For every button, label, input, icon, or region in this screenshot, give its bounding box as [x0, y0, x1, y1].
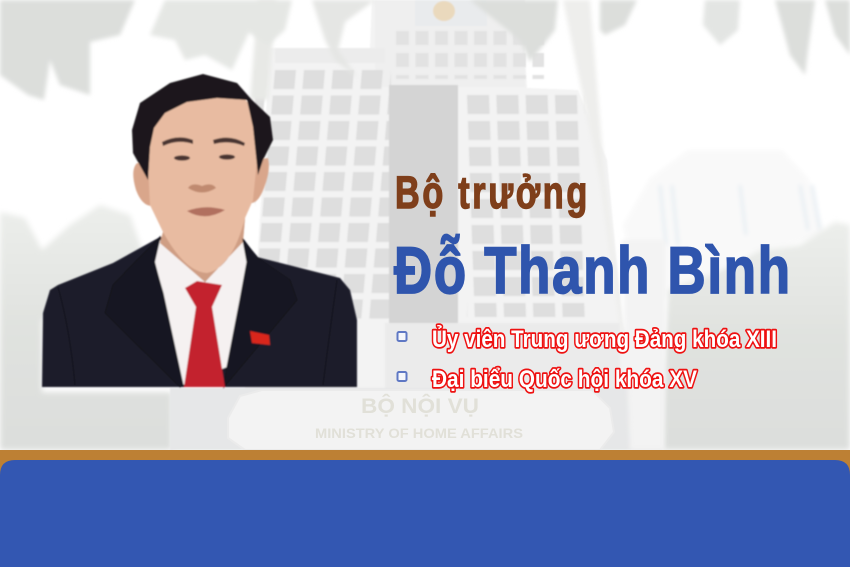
ears	[133, 158, 269, 206]
suit jacket	[42, 237, 357, 387]
bullet icon 2	[398, 372, 406, 381]
palm fronds	[0, 0, 850, 100]
trees left	[0, 205, 172, 450]
trees right	[660, 222, 850, 450]
role: Central Committee member: Ủy viên Trung ương Đảng khóa XIII	[432, 324, 777, 353]
tie	[184, 281, 225, 387]
hair	[132, 74, 273, 180]
mouth	[187, 207, 225, 216]
sign: Bộ Nội Vụ: BỘ NỘI VỤ	[361, 394, 479, 418]
jaw shadow	[160, 218, 245, 282]
bottom panel: blue	[0, 460, 850, 567]
bottom band: brown strip	[0, 450, 850, 567]
portrait: minister in dark suit	[42, 74, 357, 387]
sign: Bộ Nội Vụ	[228, 390, 614, 450]
role: National Assembly deputy: Đại biểu Quốc hội khóa XV	[432, 366, 697, 393]
background: ministry building photo	[0, 0, 850, 450]
bullet icon 1	[398, 332, 406, 341]
right lapel	[224, 240, 297, 387]
flag pin	[250, 331, 270, 345]
shoulder seams	[58, 280, 337, 385]
shirt	[155, 240, 247, 385]
heading: Bộ trưởng: Bộ trưởng	[395, 169, 587, 218]
name: Đỗ Thanh Bình: Đỗ Thanh Bình	[394, 233, 790, 307]
sign: Bộ Nội Vụ: MINISTRY OF HOME AFFAIRS	[315, 425, 523, 441]
palm trunks	[250, 0, 665, 450]
main building	[170, 0, 662, 450]
eyebrows and eyes	[162, 137, 245, 161]
nose	[188, 184, 216, 192]
distant building	[623, 150, 825, 300]
left lapel	[105, 237, 183, 387]
face and neck	[146, 92, 258, 282]
